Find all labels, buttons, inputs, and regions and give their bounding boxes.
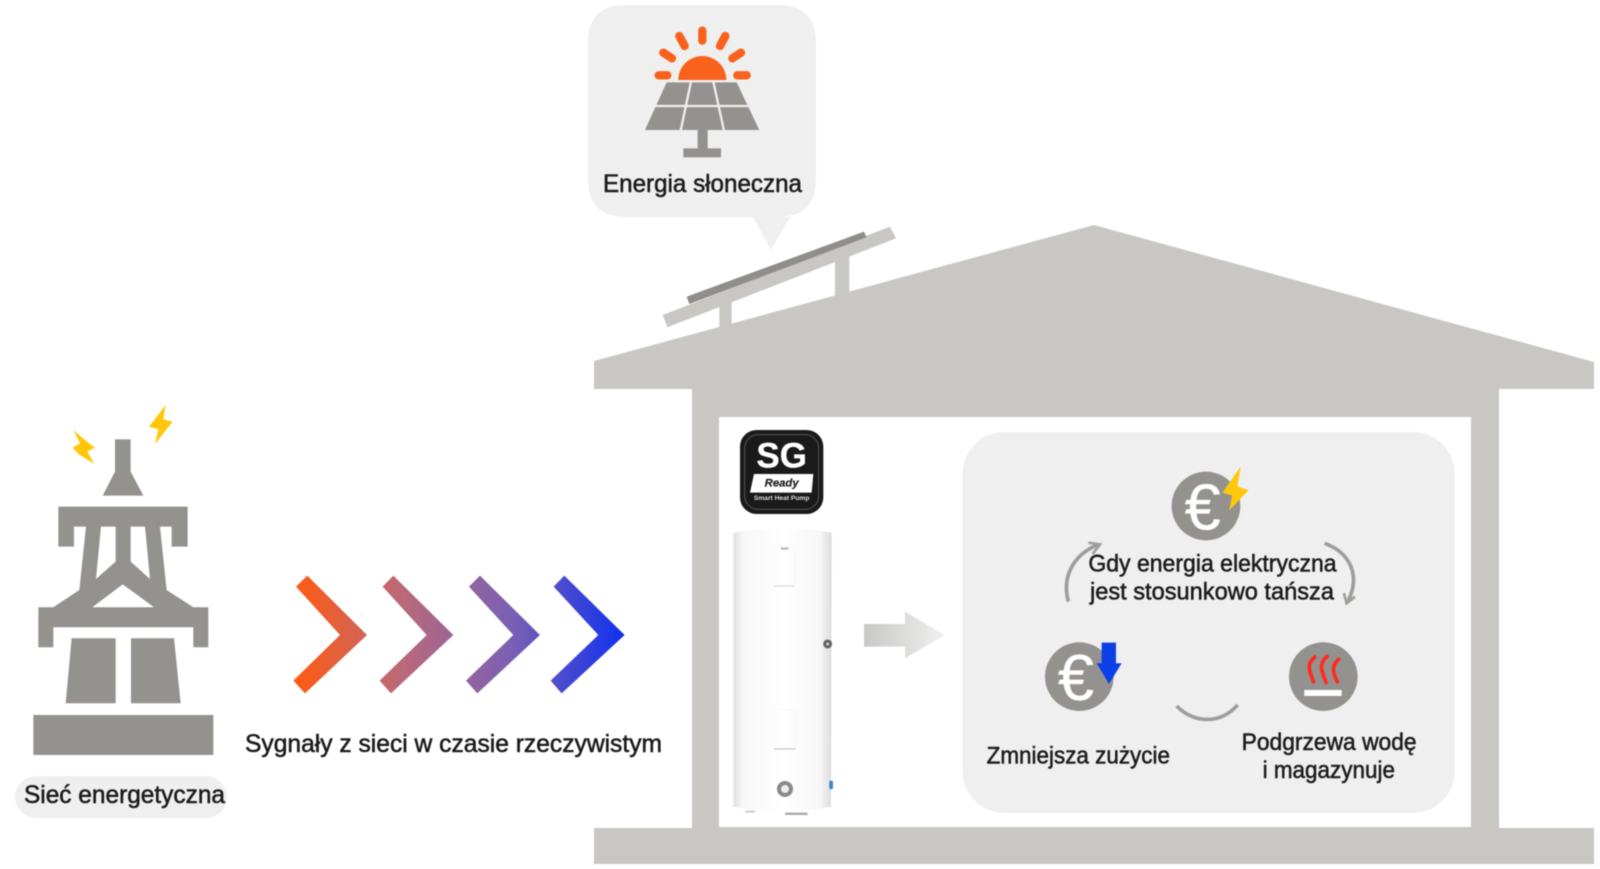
cycle arrow: bottom <box>1177 705 1238 719</box>
arrow: tank to cycle <box>864 612 945 658</box>
icon: heating <box>1289 642 1358 711</box>
icon: euro with down arrow: € <box>1058 641 1094 714</box>
label: when electricity is cheaper <box>1088 551 1337 605</box>
water tank <box>733 528 833 815</box>
cycle arrow: right <box>1325 543 1355 603</box>
solar mount on the roof <box>663 227 896 343</box>
label: heats and stores water: i magazynuje <box>1263 757 1395 784</box>
label: power grid <box>15 776 227 818</box>
icon: sun over solar panel <box>645 31 759 157</box>
panel: operating cycle <box>963 432 1455 813</box>
icon: euro with lightning: € <box>1185 470 1221 543</box>
callout: solar energy <box>588 5 816 250</box>
label: real-time signals: Sygnały z sieci w czasie rzeczywistym <box>245 730 662 758</box>
label: heats and stores water: Podgrzewa wodę <box>1242 729 1417 756</box>
badge: SG Ready: Ready <box>765 478 799 490</box>
label: solar energy: Energia słoneczna <box>603 170 802 198</box>
icon: power grid tower <box>33 405 213 755</box>
icon: euro with down arrow <box>1045 641 1122 714</box>
label: power grid: Sieć energetyczna <box>24 781 225 809</box>
icon: euro with lightning <box>1172 467 1249 543</box>
badge: SG Ready: SG <box>756 436 807 475</box>
label: heats and stores water <box>1242 729 1417 784</box>
label: when electricity is cheaper: Gdy energia elektryczna <box>1088 551 1337 578</box>
label: reduces consumption: Zmniejsza zużycie <box>987 743 1170 770</box>
badge: SG Ready <box>740 430 823 514</box>
badge: SG Ready: Smart Heat Pump <box>754 495 809 502</box>
roof <box>594 225 1594 864</box>
interior <box>719 417 1471 827</box>
house <box>594 225 1594 864</box>
cycle arrow: left <box>1066 543 1100 602</box>
water heater with SG Ready badge <box>733 430 945 815</box>
chevron arrows: real-time signals <box>293 576 625 693</box>
label: when electricity is cheaper: jest stosunkowo tańsza <box>1089 578 1335 605</box>
